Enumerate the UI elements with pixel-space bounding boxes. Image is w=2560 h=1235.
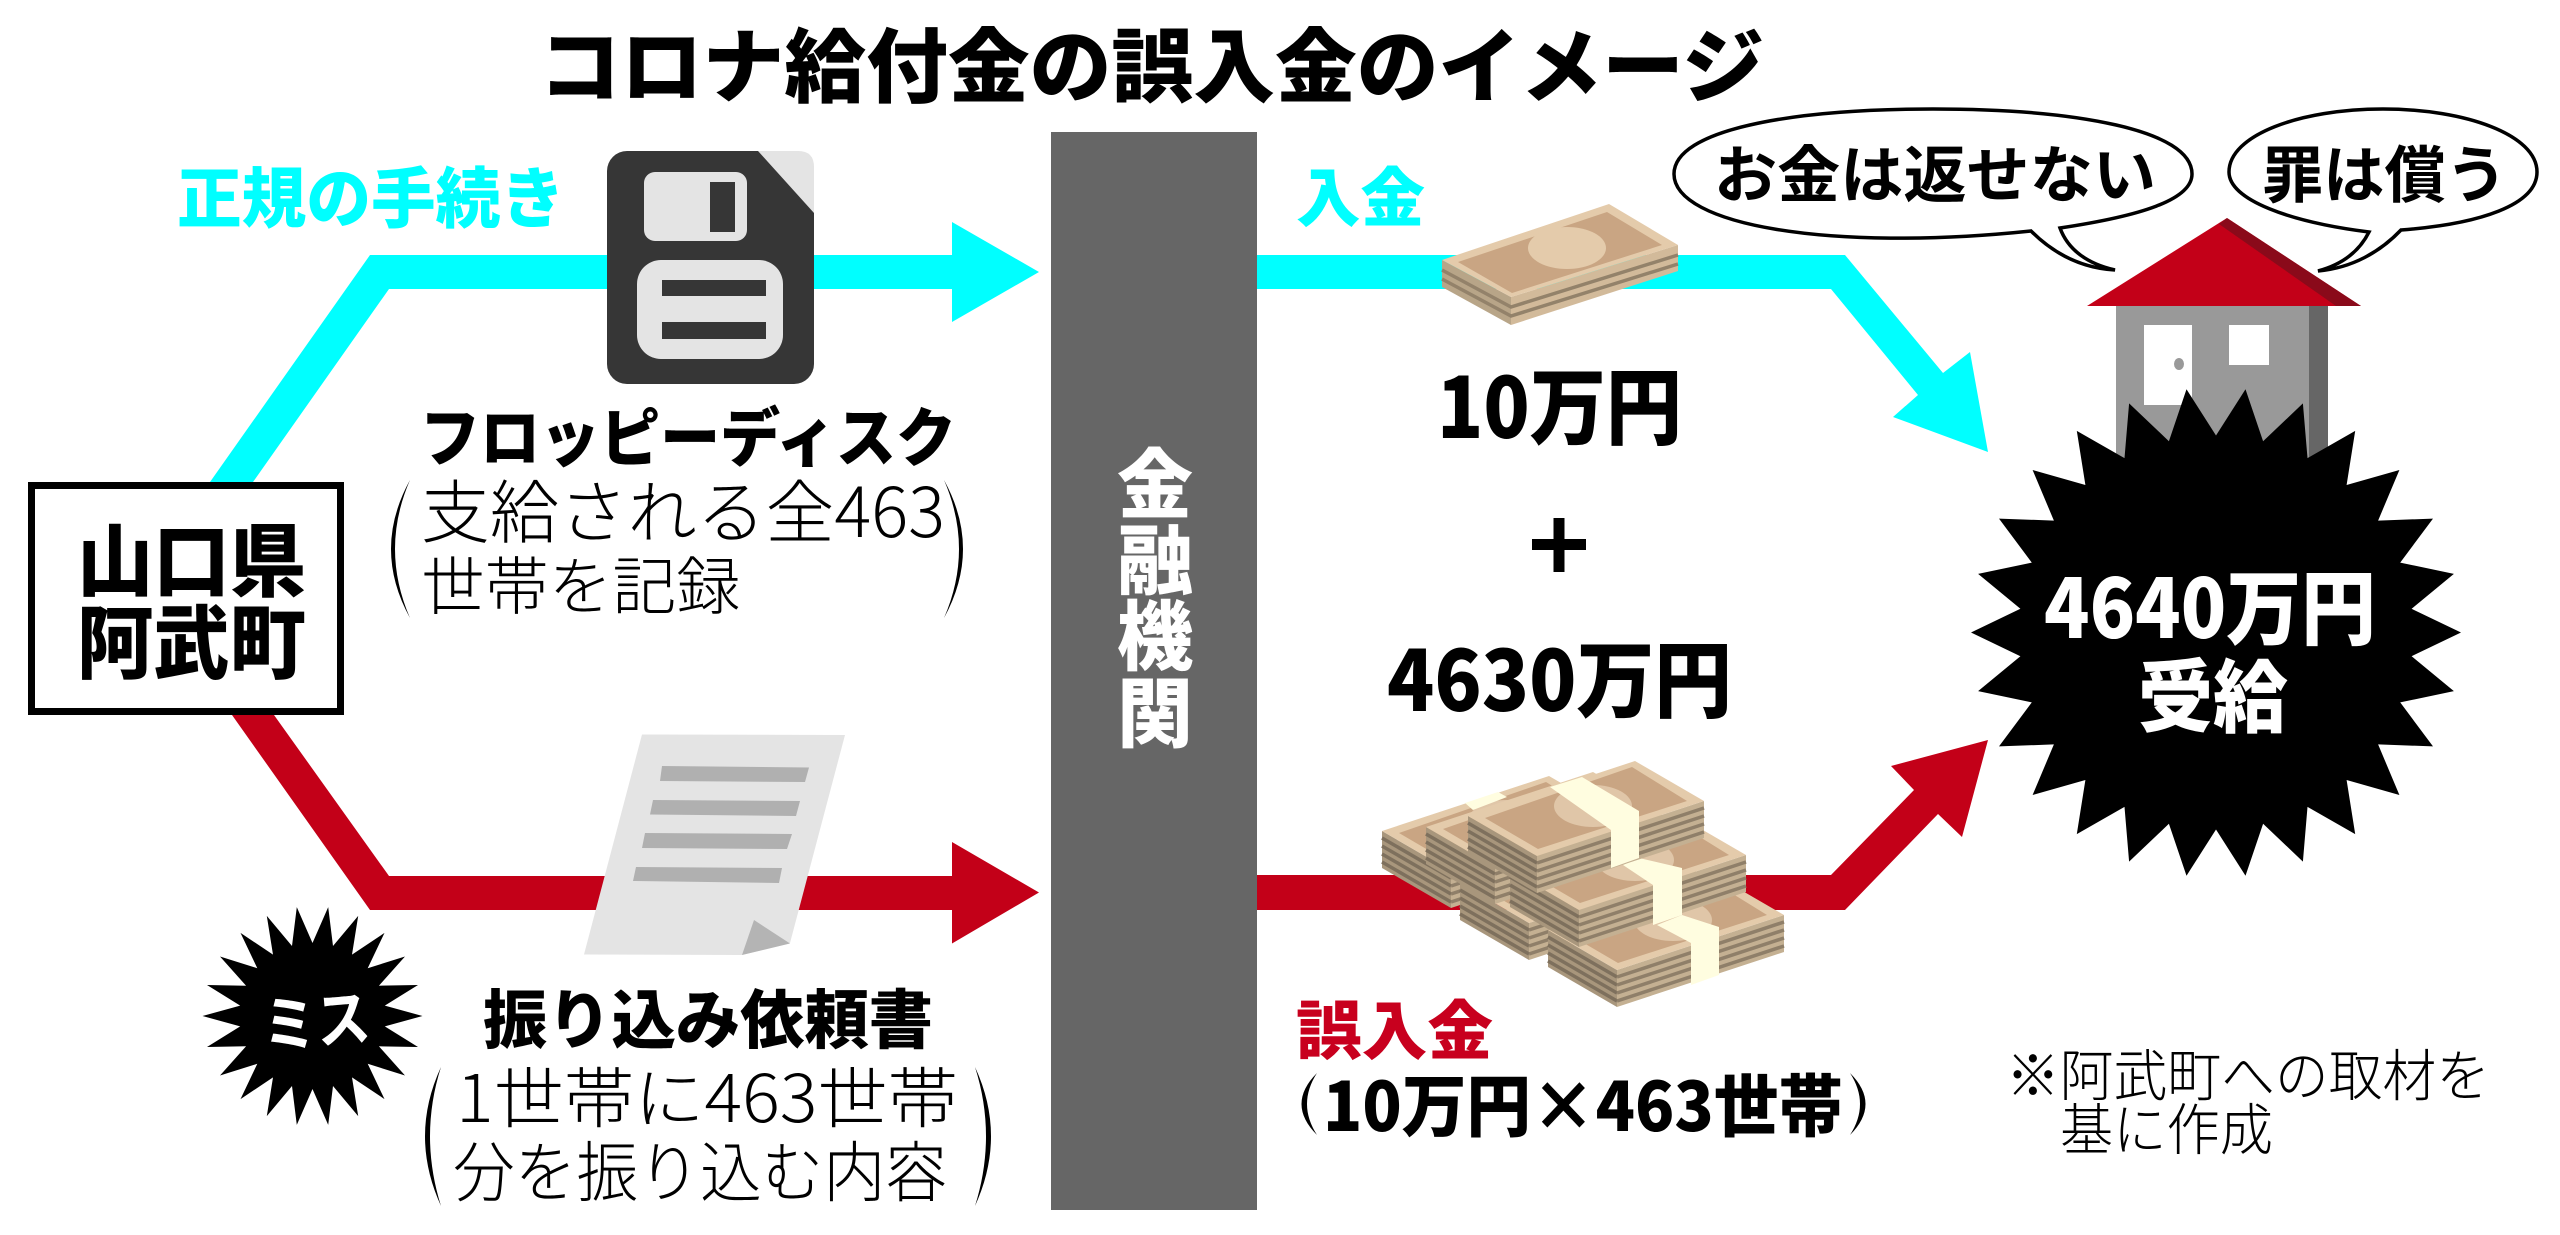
note: transfer request contents xyxy=(425,1046,991,1216)
panel: financial institution: 金 xyxy=(1117,424,1193,534)
label: deposit: 入金 xyxy=(1296,148,1425,240)
heading: transfer request: 振り込み依頼書 xyxy=(483,970,933,1062)
footnote: 基に作成 xyxy=(2060,1086,2273,1167)
footnote: ※阿武町への取材を xyxy=(2006,1032,2490,1113)
burst: 46.4 million yen received: 受給 xyxy=(2138,634,2288,750)
icon: single bundle of bills xyxy=(1442,204,1678,325)
panel: financial institution: 融 xyxy=(1117,500,1193,610)
icon: house xyxy=(2087,218,2361,486)
panel: financial institution: 機 xyxy=(1117,576,1193,686)
label: regular procedure: 正規の手続き xyxy=(177,146,565,242)
box: Abu town: 山口県 xyxy=(77,498,306,614)
arrow: cyan regular procedure to bank xyxy=(210,222,1039,482)
amount: 46.3 million yen: 4630万円 xyxy=(1387,615,1732,736)
title: コロナ給付金の誤入金のイメージ xyxy=(539,3,1764,120)
note: floppy disk contents: 支給される全463 xyxy=(421,457,945,557)
panel: financial institution xyxy=(1051,132,1257,1210)
burst: 46.4 million yen received xyxy=(1971,389,2461,876)
note: transfer request contents: 分を振り込む内容 xyxy=(453,1120,947,1216)
speech bubble: will atone for the crime xyxy=(2229,109,2537,271)
burst: mistake xyxy=(202,907,422,1125)
label: mistaken deposit: 誤入金 xyxy=(1296,981,1493,1073)
amount: 100,000 yen times 463 households: 10万円×463世帯 xyxy=(1323,1052,1843,1151)
burst: mistake: ミス xyxy=(258,967,373,1067)
box: Abu town xyxy=(32,486,340,712)
icon: floppy disk xyxy=(607,151,814,384)
burst: 46.4 million yen received: 4640万円 xyxy=(2044,543,2376,662)
speech bubble: will atone for the crime: 罪は償う xyxy=(2262,125,2507,215)
arrow: red mistaken deposit to household xyxy=(1257,740,1988,910)
plus sign xyxy=(1532,518,1586,572)
note: floppy disk contents: 世帯を記録 xyxy=(421,537,740,628)
note: transfer request contents: 1世帯に463世帯 xyxy=(456,1046,958,1142)
icon: pile of bill bundles xyxy=(1382,761,1784,1007)
amount: 100,000 yen: 10万円 xyxy=(1437,342,1682,463)
speech bubble: cannot return the money xyxy=(1674,109,2192,270)
box: Abu town: 阿武町 xyxy=(77,580,306,696)
footnote xyxy=(2006,1032,2490,1167)
speech bubble: cannot return the money: お金は返せない xyxy=(1714,125,2156,215)
note: floppy disk contents xyxy=(391,457,963,628)
panel: financial institution: 関 xyxy=(1117,653,1193,763)
heading: floppy disk: フロッピーディスク xyxy=(420,388,956,480)
arrow: cyan deposit to household xyxy=(1257,255,1988,452)
icon: transfer request document xyxy=(584,734,845,955)
arrow: red mistaken procedure to bank xyxy=(232,715,1039,944)
